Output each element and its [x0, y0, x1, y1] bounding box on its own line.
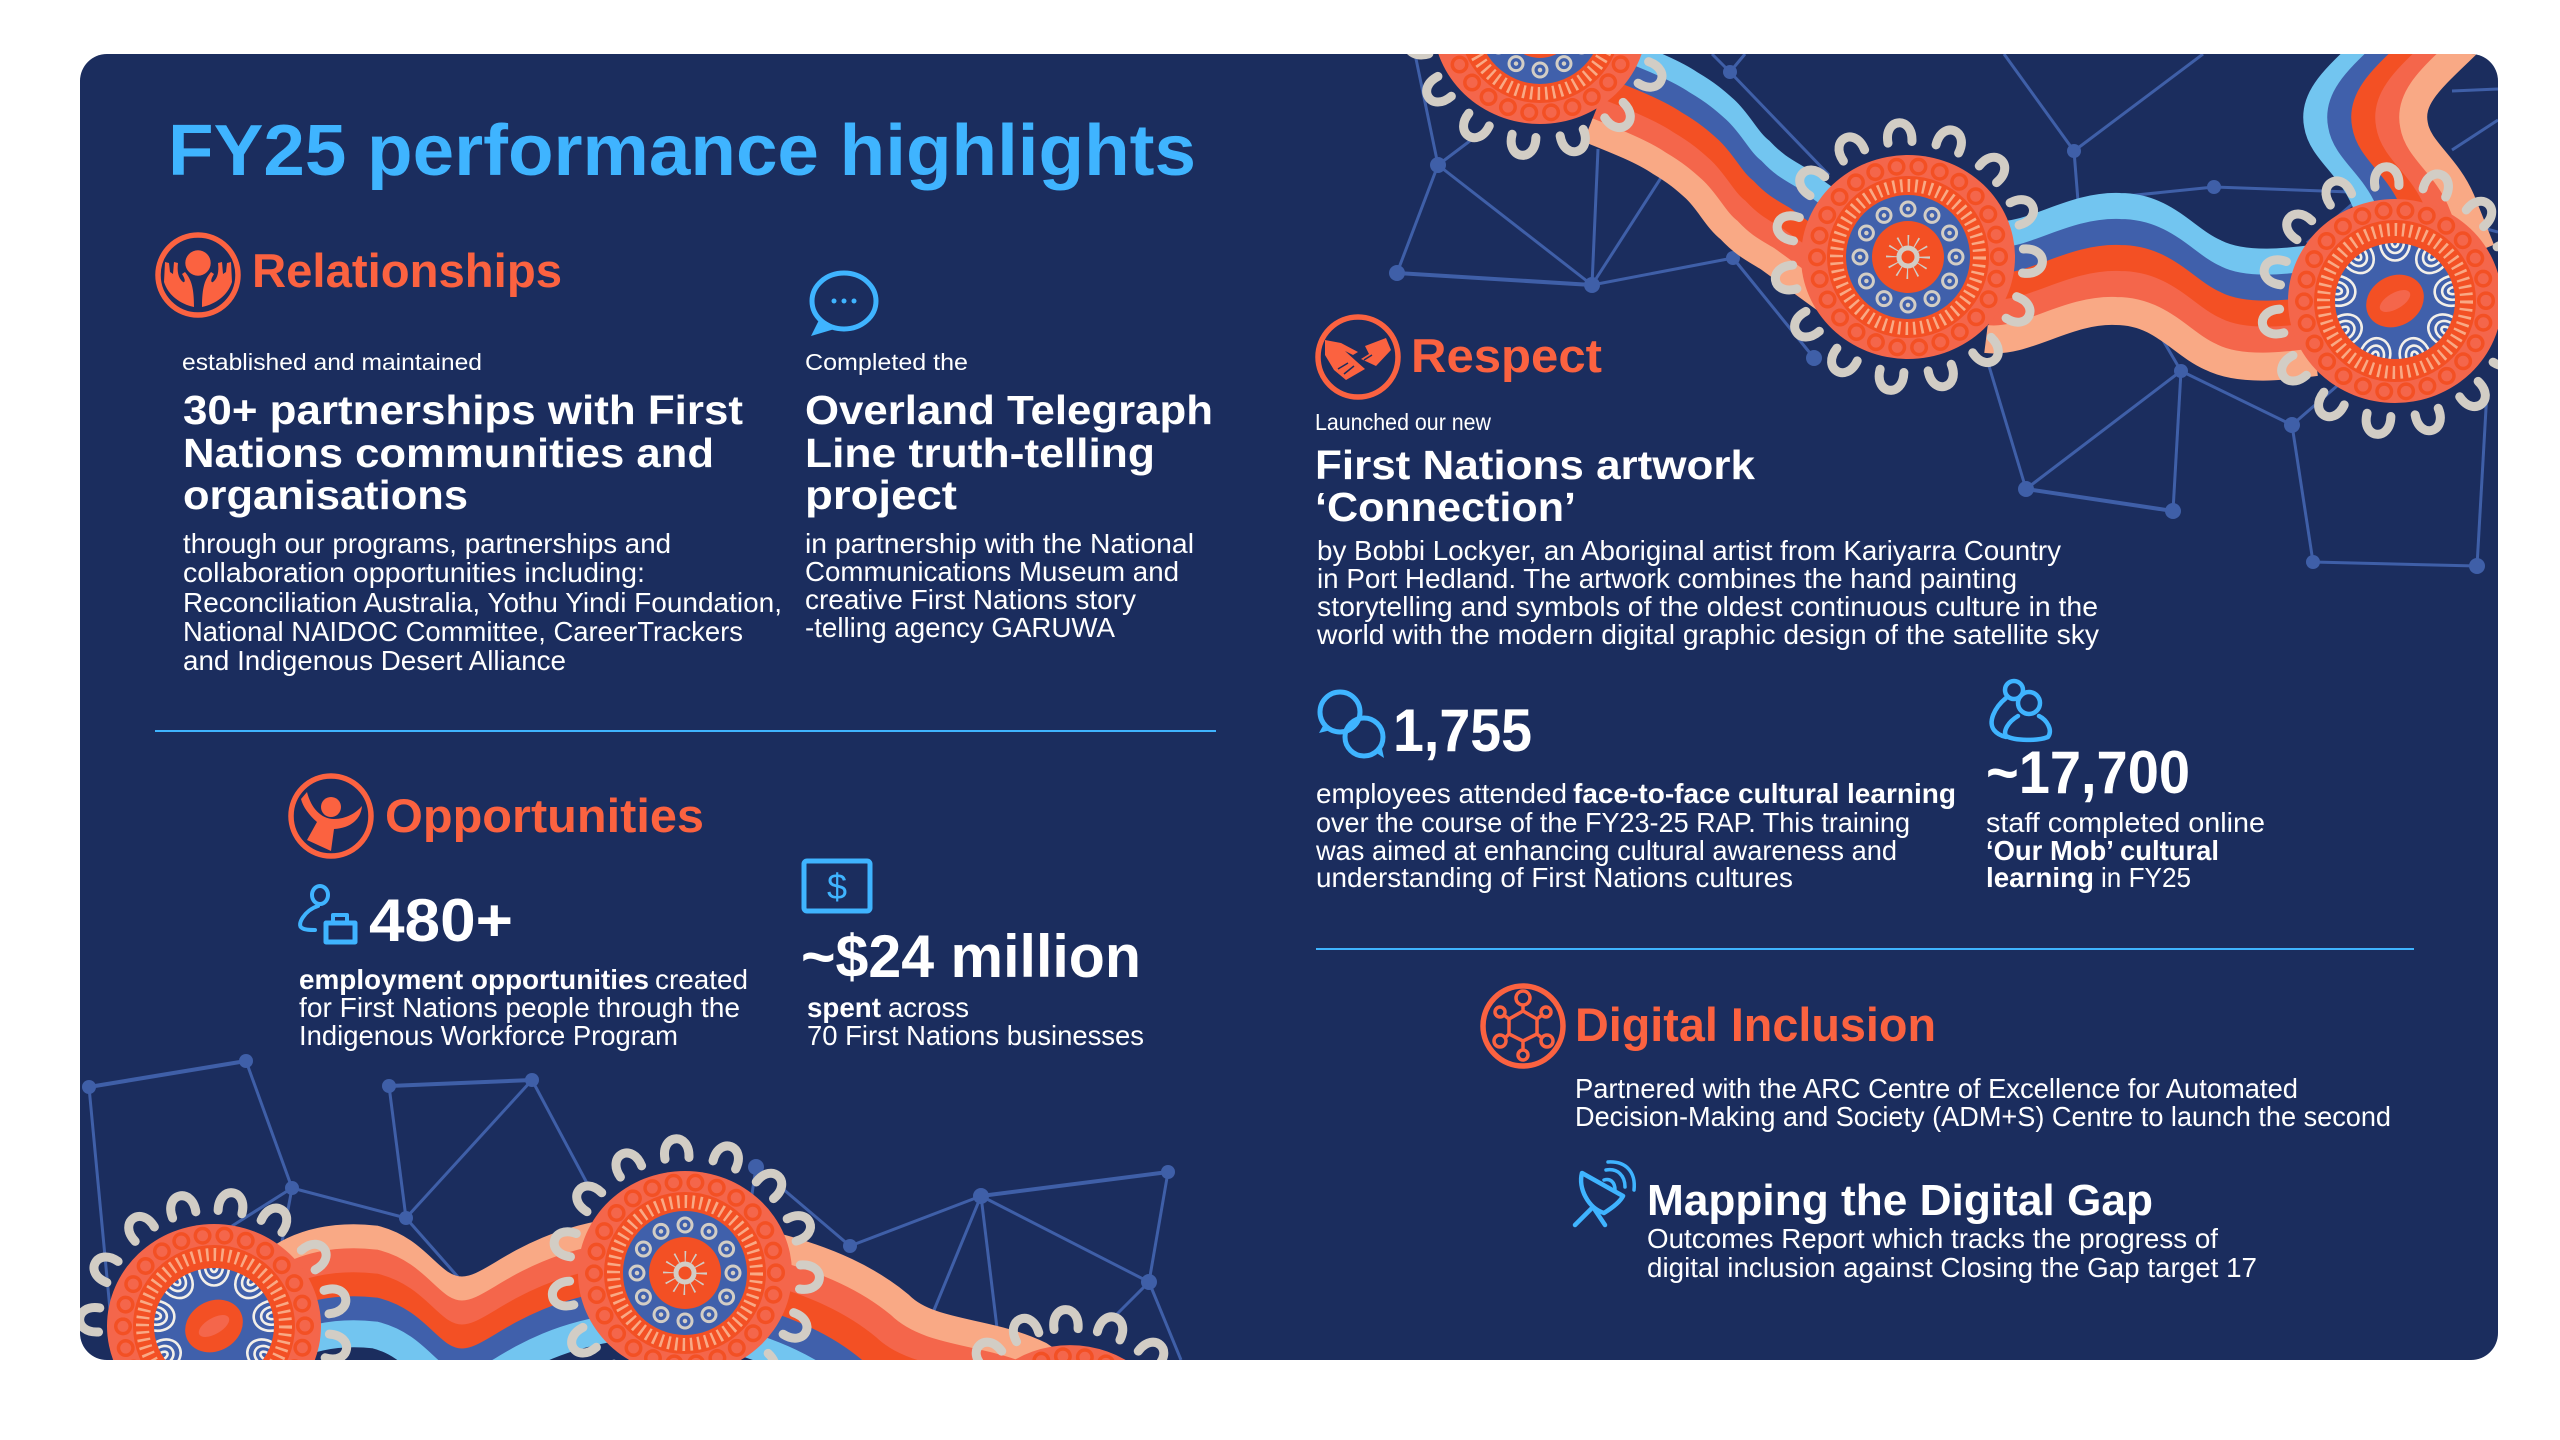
text block: partnership: Partnered with the ARC Centre of Excellence for Automated — [1575, 1073, 2298, 1104]
subheading: Mapping the Digital Gap — [1647, 1176, 2153, 1225]
text block: telegraph line: Line truth-telling — [805, 430, 1155, 476]
panel: respect — [1315, 317, 2265, 893]
text block: spend — [807, 992, 1144, 1051]
text block: partnerships: National NAIDOC Committee, CareerTrackers — [183, 616, 743, 647]
text block: partnerships: Reconciliation Australia, Yothu Yindi Foundation, — [183, 587, 782, 618]
text block: partnerships: through our programs, partnerships and — [183, 528, 671, 559]
text block: report: Outcomes Report which tracks the progress of — [1647, 1223, 2218, 1254]
river band: bottom left segment — [277, 1222, 608, 1360]
icon: network hexagon — [1483, 986, 1563, 1066]
text block: employment: employment opportunities — [299, 964, 649, 995]
text block: partnerships: and Indigenous Desert Alliance — [183, 645, 566, 676]
network lines: top right — [1389, 54, 2498, 574]
text block: employment: created — [655, 964, 748, 995]
heading: Respect — [1411, 329, 1602, 382]
text block: telegraph line: creative First Nations story — [805, 584, 1136, 615]
heading: Relationships — [252, 244, 562, 297]
river band: middle segment — [1986, 207, 2320, 367]
panel: opportunities — [291, 776, 1144, 1051]
text block: partnerships: organisations — [183, 472, 468, 518]
icon: person with raised arms — [291, 776, 371, 856]
text block: artwork: by Bobbi Lockyer, an Aboriginal artist from Kariyarra Country — [1317, 535, 2061, 566]
text block: artwork: in Port Hedland. The artwork combines the hand painting — [1317, 563, 2017, 594]
text block: telegraph line: project — [805, 472, 957, 518]
text block: report: digital inclusion against Closing the Gap target 17 — [1647, 1252, 2257, 1283]
text block: report — [1647, 1223, 2257, 1283]
text block: partnerships — [182, 349, 782, 676]
text block: partnership — [1575, 1073, 2391, 1132]
stat: 1,755: 1,755 — [1393, 697, 1532, 764]
icon: person with briefcase — [300, 886, 355, 942]
network lines: bottom left — [82, 1054, 1181, 1360]
river band: bottom right segment — [745, 1234, 1052, 1360]
text block: artwork: First Nations artwork — [1315, 442, 1755, 488]
text block: telegraph line: -telling agency GARUWA — [805, 612, 1115, 643]
river band: right rising segment — [2317, 40, 2481, 250]
title: FY25 performance highlights — [168, 111, 1196, 191]
icon: people group — [1992, 681, 2050, 740]
stat: $24 million: ~$24 million — [801, 923, 1141, 990]
text block: face to face — [1315, 778, 1956, 893]
text block: spend: across — [888, 992, 969, 1023]
text block: employment — [299, 964, 748, 1051]
text block: partnerships: 30+ partnerships with First — [183, 387, 743, 433]
text block: partnerships: established and maintained — [182, 349, 482, 375]
mandala: top partial — [1407, 54, 1666, 160]
text block: partnerships: collaboration opportunities including: — [183, 557, 645, 588]
mandala: top centre with sun — [1773, 122, 2043, 392]
stat: 480+: 480+ — [369, 887, 513, 954]
heading: Digital Inclusion — [1575, 998, 1936, 1051]
mandala: bottom left with arcs — [80, 1188, 352, 1360]
text block: spend: spent — [807, 992, 881, 1023]
text block: artwork: world with the modern digital graphic design of the satellite sky — [1316, 619, 2099, 650]
text block: artwork: ‘Connection’ — [1315, 484, 1576, 530]
stat: 17,700: ~17,700 — [1986, 739, 2190, 806]
river band: upper left segment — [1588, 54, 1831, 310]
text block: employment: for First Nations people through the — [299, 992, 740, 1023]
text block: spend: 70 First Nations businesses — [807, 1020, 1144, 1051]
mandala: bottom right partial — [972, 1305, 1168, 1360]
text block: employment: Indigenous Workforce Program — [299, 1020, 678, 1051]
mandala: bottom centre with sun — [548, 1134, 824, 1360]
text block: face to face: understanding of First Nations cultures — [1316, 862, 1793, 893]
text block: telegraph line: Communications Museum and — [805, 556, 1179, 587]
panel: digital inclusion — [1483, 986, 2391, 1283]
icon: two chat bubbles — [1319, 692, 1384, 758]
text block: face to face: face-to-face cultural learning — [1573, 778, 1956, 809]
icon: dollar screen: $ — [827, 866, 847, 907]
text block: face to face: over the course of the FY23-25 RAP. This training — [1316, 807, 1910, 838]
text block: artwork — [1315, 409, 2099, 650]
text block: artwork: Launched our new — [1315, 409, 1492, 435]
text block: partnership: Decision-Making and Society (ADM+S) Centre to launch the second — [1575, 1101, 2391, 1132]
text block: our mob: in FY25 — [2101, 862, 2191, 893]
text block: telegraph line: Completed the — [805, 349, 968, 375]
text block: face to face: employees attended — [1316, 778, 1567, 809]
icon: clasped hands — [1318, 317, 1398, 397]
text block: artwork: storytelling and symbols of the oldest continuous culture in the — [1317, 591, 2098, 622]
text block: telegraph line: Overland Telegraph — [805, 387, 1213, 433]
icon: satellite dish — [1575, 1162, 1634, 1225]
heading: Opportunities — [385, 789, 704, 842]
text block: partnerships: Nations communities and — [183, 430, 714, 476]
icon: speech bubble — [811, 273, 876, 336]
mandala: top right with arcs — [2260, 166, 2530, 436]
icon: hands holding person — [158, 235, 238, 315]
text block: face to face: was aimed at enhancing cultural awareness and — [1315, 835, 1897, 866]
text block: telegraph line: in partnership with the National — [805, 528, 1194, 559]
icon: dollar screen — [804, 861, 870, 911]
text block: our mob: staff completed online — [1986, 807, 2265, 838]
text block: telegraph line — [805, 349, 1213, 643]
text block: our mob: learning — [1986, 862, 2094, 893]
text block: our mob: ‘Our Mob’ cultural — [1986, 835, 2219, 866]
panel: relationships — [158, 235, 1213, 676]
text block: our mob — [1986, 807, 2265, 893]
